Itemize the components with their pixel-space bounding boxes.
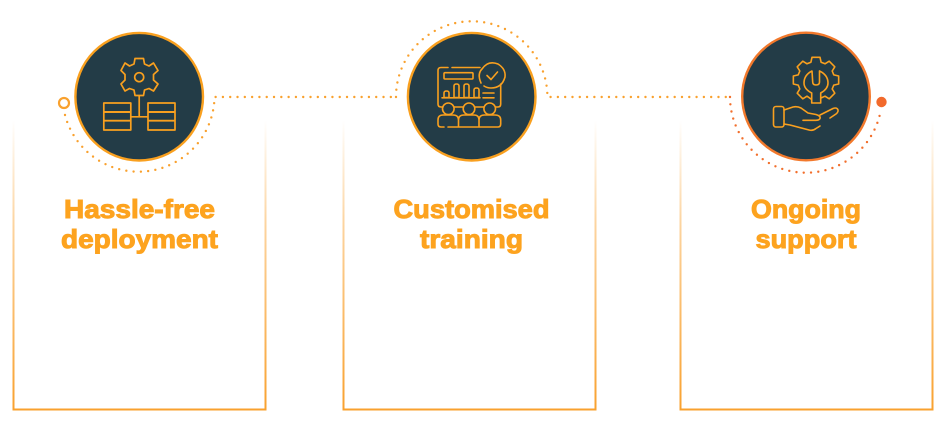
heading: Ongoing support: Ongoing: [751, 194, 861, 224]
heading: Hassle-free deployment: [61, 194, 218, 254]
card: Hassle-free deployment: [14, 120, 266, 410]
icon: training dashboard and audience: [408, 33, 536, 161]
card: Ongoing support: [680, 120, 932, 410]
heading: Ongoing support: support: [756, 224, 857, 254]
icon: gear and database tables: [75, 33, 203, 161]
heading: Hassle-free deployment: deployment: [61, 224, 218, 254]
dotted connector: second arc and line: [396, 21, 733, 97]
heading: Ongoing support: [751, 194, 861, 254]
start marker: hollow circle: [59, 98, 69, 108]
end marker: filled circle: [876, 97, 887, 107]
card: Customised training: [344, 120, 596, 410]
dotted connector: third arc: [730, 97, 881, 173]
dotted connector: first arc and line: [65, 97, 398, 172]
heading: Customised training: Customised: [394, 194, 550, 224]
icon: hand holding gear and wrench: [742, 33, 870, 160]
heading: Customised training: training: [420, 224, 523, 254]
heading: Hassle-free deployment: Hassle-free: [64, 194, 215, 224]
heading: Customised training: [394, 194, 550, 254]
